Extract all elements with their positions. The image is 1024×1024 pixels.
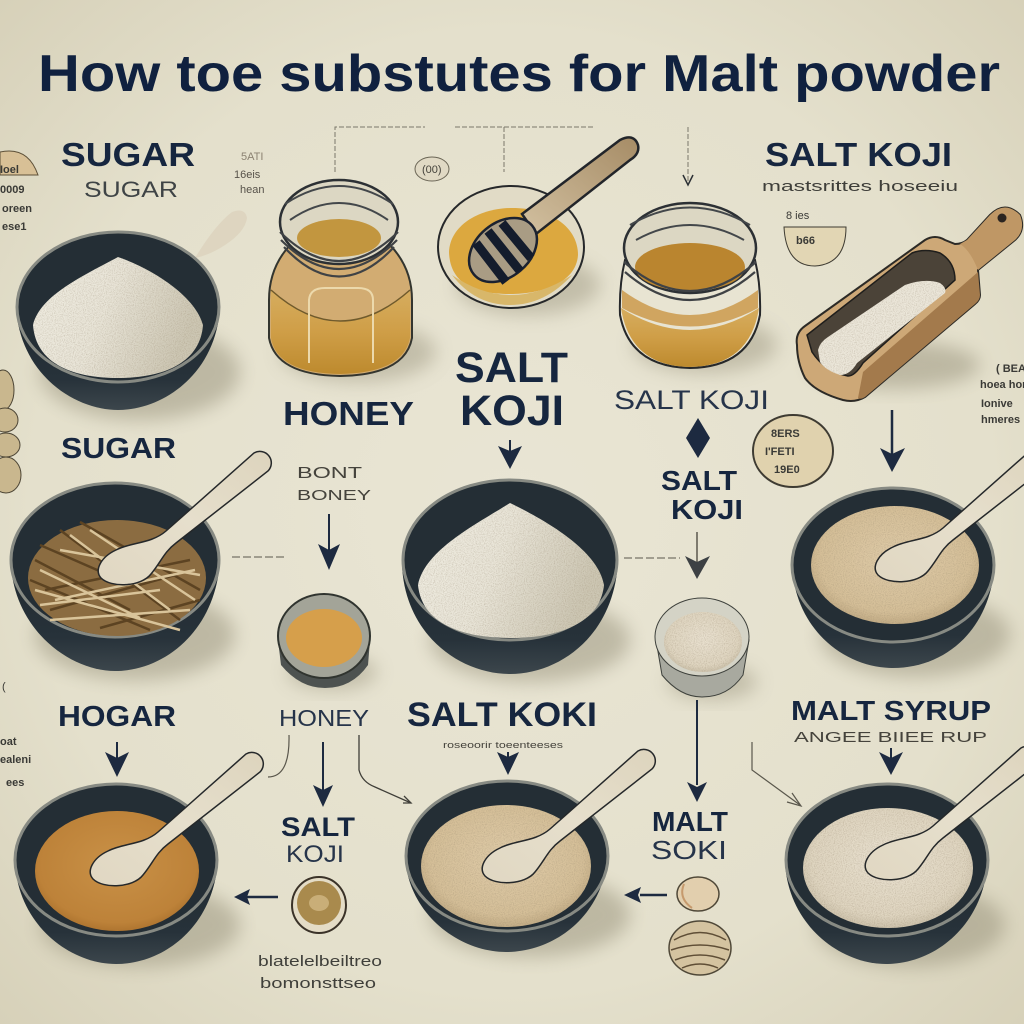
- badge: top center: [415, 157, 449, 181]
- label: salt koji large: SALT: [455, 344, 568, 392]
- panel: sugar top left: [0, 136, 264, 420]
- heading: salt koji: SALT KOJI: [765, 136, 952, 173]
- note: bont boney: BONT: [297, 465, 362, 482]
- note: bottom left margin: [0, 681, 31, 789]
- note: small label: hean: [240, 184, 264, 196]
- label: malt soki: MALT: [652, 806, 728, 837]
- arrow: diagonal to right bowl: [752, 742, 801, 806]
- label: salt koji bottom left: SALT: [281, 812, 356, 842]
- arrow: to small honey cup: [318, 514, 340, 570]
- panel: honey dish with dipper: [438, 137, 638, 315]
- note: left margin coins: [0, 370, 21, 493]
- arrow: straw bowl to cup: [232, 556, 286, 558]
- note: left margin: 0009: [0, 184, 24, 196]
- label: malt soki: SOKI: [651, 835, 727, 865]
- icon: seed bottom: [669, 921, 731, 975]
- icon: spoon: [865, 746, 1024, 880]
- bowl: straw: [11, 483, 235, 680]
- note: left margin: ese1: [2, 221, 26, 233]
- label: salt koji stacked: SALT: [661, 465, 737, 496]
- arrow: salt koji to bowl: [498, 440, 522, 469]
- arrow: center to cup: [624, 557, 680, 559]
- label: honey bottom: HONEY: [279, 705, 369, 731]
- icon: spoon: [875, 448, 1024, 582]
- arrow: honey to bowl: [359, 735, 411, 803]
- note: round badge: b66: [796, 235, 815, 247]
- heading: hogar: HOGAR: [58, 701, 176, 733]
- note: bont boney: [297, 465, 371, 504]
- note: small label: 16eis: [234, 169, 261, 181]
- icon: round seed: [292, 877, 346, 933]
- note: left margin: oreen: [2, 203, 32, 215]
- note: round badge middle: 19E0: [774, 464, 800, 476]
- subheading: garbled: mastsrittes hoseeiu: [762, 178, 958, 195]
- arrow: cup down: [687, 700, 707, 802]
- heading: salt koki: SALT KOKI: [407, 696, 597, 734]
- bowl: sugar: [16, 232, 240, 420]
- note: right margin: hmeres: [981, 414, 1020, 426]
- icon: honey dipper: [457, 137, 638, 295]
- label: salt koji large: KOJI: [460, 387, 564, 435]
- bowl: caramel: [15, 784, 240, 967]
- note: round badge middle: 8ERS: [771, 428, 800, 440]
- panel: sugar straw bowl: [11, 433, 271, 680]
- panel: honey jar one: [269, 180, 436, 382]
- label: salt koji middle right: SALT KOJI: [614, 385, 769, 415]
- note: left margin: Ioel: [0, 164, 19, 176]
- arrow: left to bowl: [624, 887, 667, 903]
- arrow: koji to cup: [685, 532, 710, 579]
- label: malt soki: [651, 806, 728, 865]
- subheading: tiny: roseoorir toeenteeses: [443, 740, 564, 750]
- bowl: bottom right: [785, 784, 1005, 967]
- note: round badge: [784, 210, 846, 266]
- panel: salt koji top right: [762, 136, 1022, 401]
- note: round badge middle: [753, 415, 833, 487]
- label: salt koji bottom left: [281, 812, 356, 868]
- bowl: bottom middle: [405, 781, 630, 957]
- note: bottom garbled: blatelelbeiltreo: [258, 953, 382, 970]
- arrow: to bowl: [879, 748, 903, 775]
- arrow: left pointing: [234, 889, 278, 905]
- arrow: to bowl: [497, 752, 519, 775]
- connector arrows top: [335, 127, 693, 185]
- icon: spoon: [98, 451, 271, 585]
- note: right margin: [980, 363, 1024, 426]
- subheading: sugar: SUGAR: [84, 177, 178, 202]
- arrow: curved spoon connector: [268, 735, 289, 777]
- note: round badge: 8 ies: [786, 210, 810, 222]
- icon: sugar spoon handle: [195, 210, 247, 258]
- note: right margin: Ionive: [981, 398, 1013, 410]
- badge: top center: (00): [422, 164, 442, 176]
- label: salt koji stacked: KOJI: [671, 494, 743, 525]
- note: bottom left margin: ealeni: [0, 754, 31, 766]
- note: round badge middle: I'FETI: [765, 446, 795, 458]
- subheading: garbled: ANGEE BIIEE RUP: [794, 729, 987, 746]
- panel: bottom right bowl: [785, 695, 1024, 967]
- panel: bottom middle bowl: [405, 696, 655, 957]
- arrow: honey down: [313, 742, 333, 807]
- icon: spoon: [90, 752, 263, 886]
- panel: tan bowl right: [792, 448, 1024, 677]
- note: bottom left margin: ees: [6, 777, 24, 789]
- note: bottom left margin: (: [2, 681, 6, 693]
- heading: sugar: SUGAR: [61, 136, 195, 173]
- label: salt koji large: [455, 344, 568, 435]
- icon: seed top: [677, 877, 719, 911]
- icon: small honey cup: [278, 594, 377, 690]
- title: How toe substutes for Malt powder: [38, 45, 1000, 103]
- note: bont boney: BONEY: [297, 487, 371, 504]
- icon: diamond: [686, 418, 710, 458]
- note: left margin: [0, 151, 38, 233]
- label: salt koji stacked: [661, 465, 743, 525]
- note: bottom left margin: oat: [0, 736, 17, 748]
- heading: malt syrup: MALT SYRUP: [791, 695, 991, 726]
- panel: caramel bowl bottom left: [15, 701, 263, 967]
- arrow: scoop to bowl: [880, 410, 905, 472]
- note: small label: 5ATI: [241, 151, 263, 163]
- note: bottom garbled: bomonsttseo: [260, 975, 376, 992]
- label: honey: HONEY: [283, 395, 414, 432]
- icon: wooden scoop: [797, 208, 1022, 401]
- icon: spoon: [482, 749, 655, 883]
- note: bottom garbled: [258, 953, 382, 992]
- note: small label: [234, 151, 264, 196]
- arrow: to caramel bowl: [105, 742, 129, 777]
- panel: honey jar two: [620, 203, 777, 373]
- heading: sugar: SUGAR: [61, 433, 176, 465]
- icon: small koji cup: [655, 598, 757, 700]
- panel: center big bowl: [402, 480, 630, 682]
- label: salt koji bottom left: KOJI: [286, 841, 344, 868]
